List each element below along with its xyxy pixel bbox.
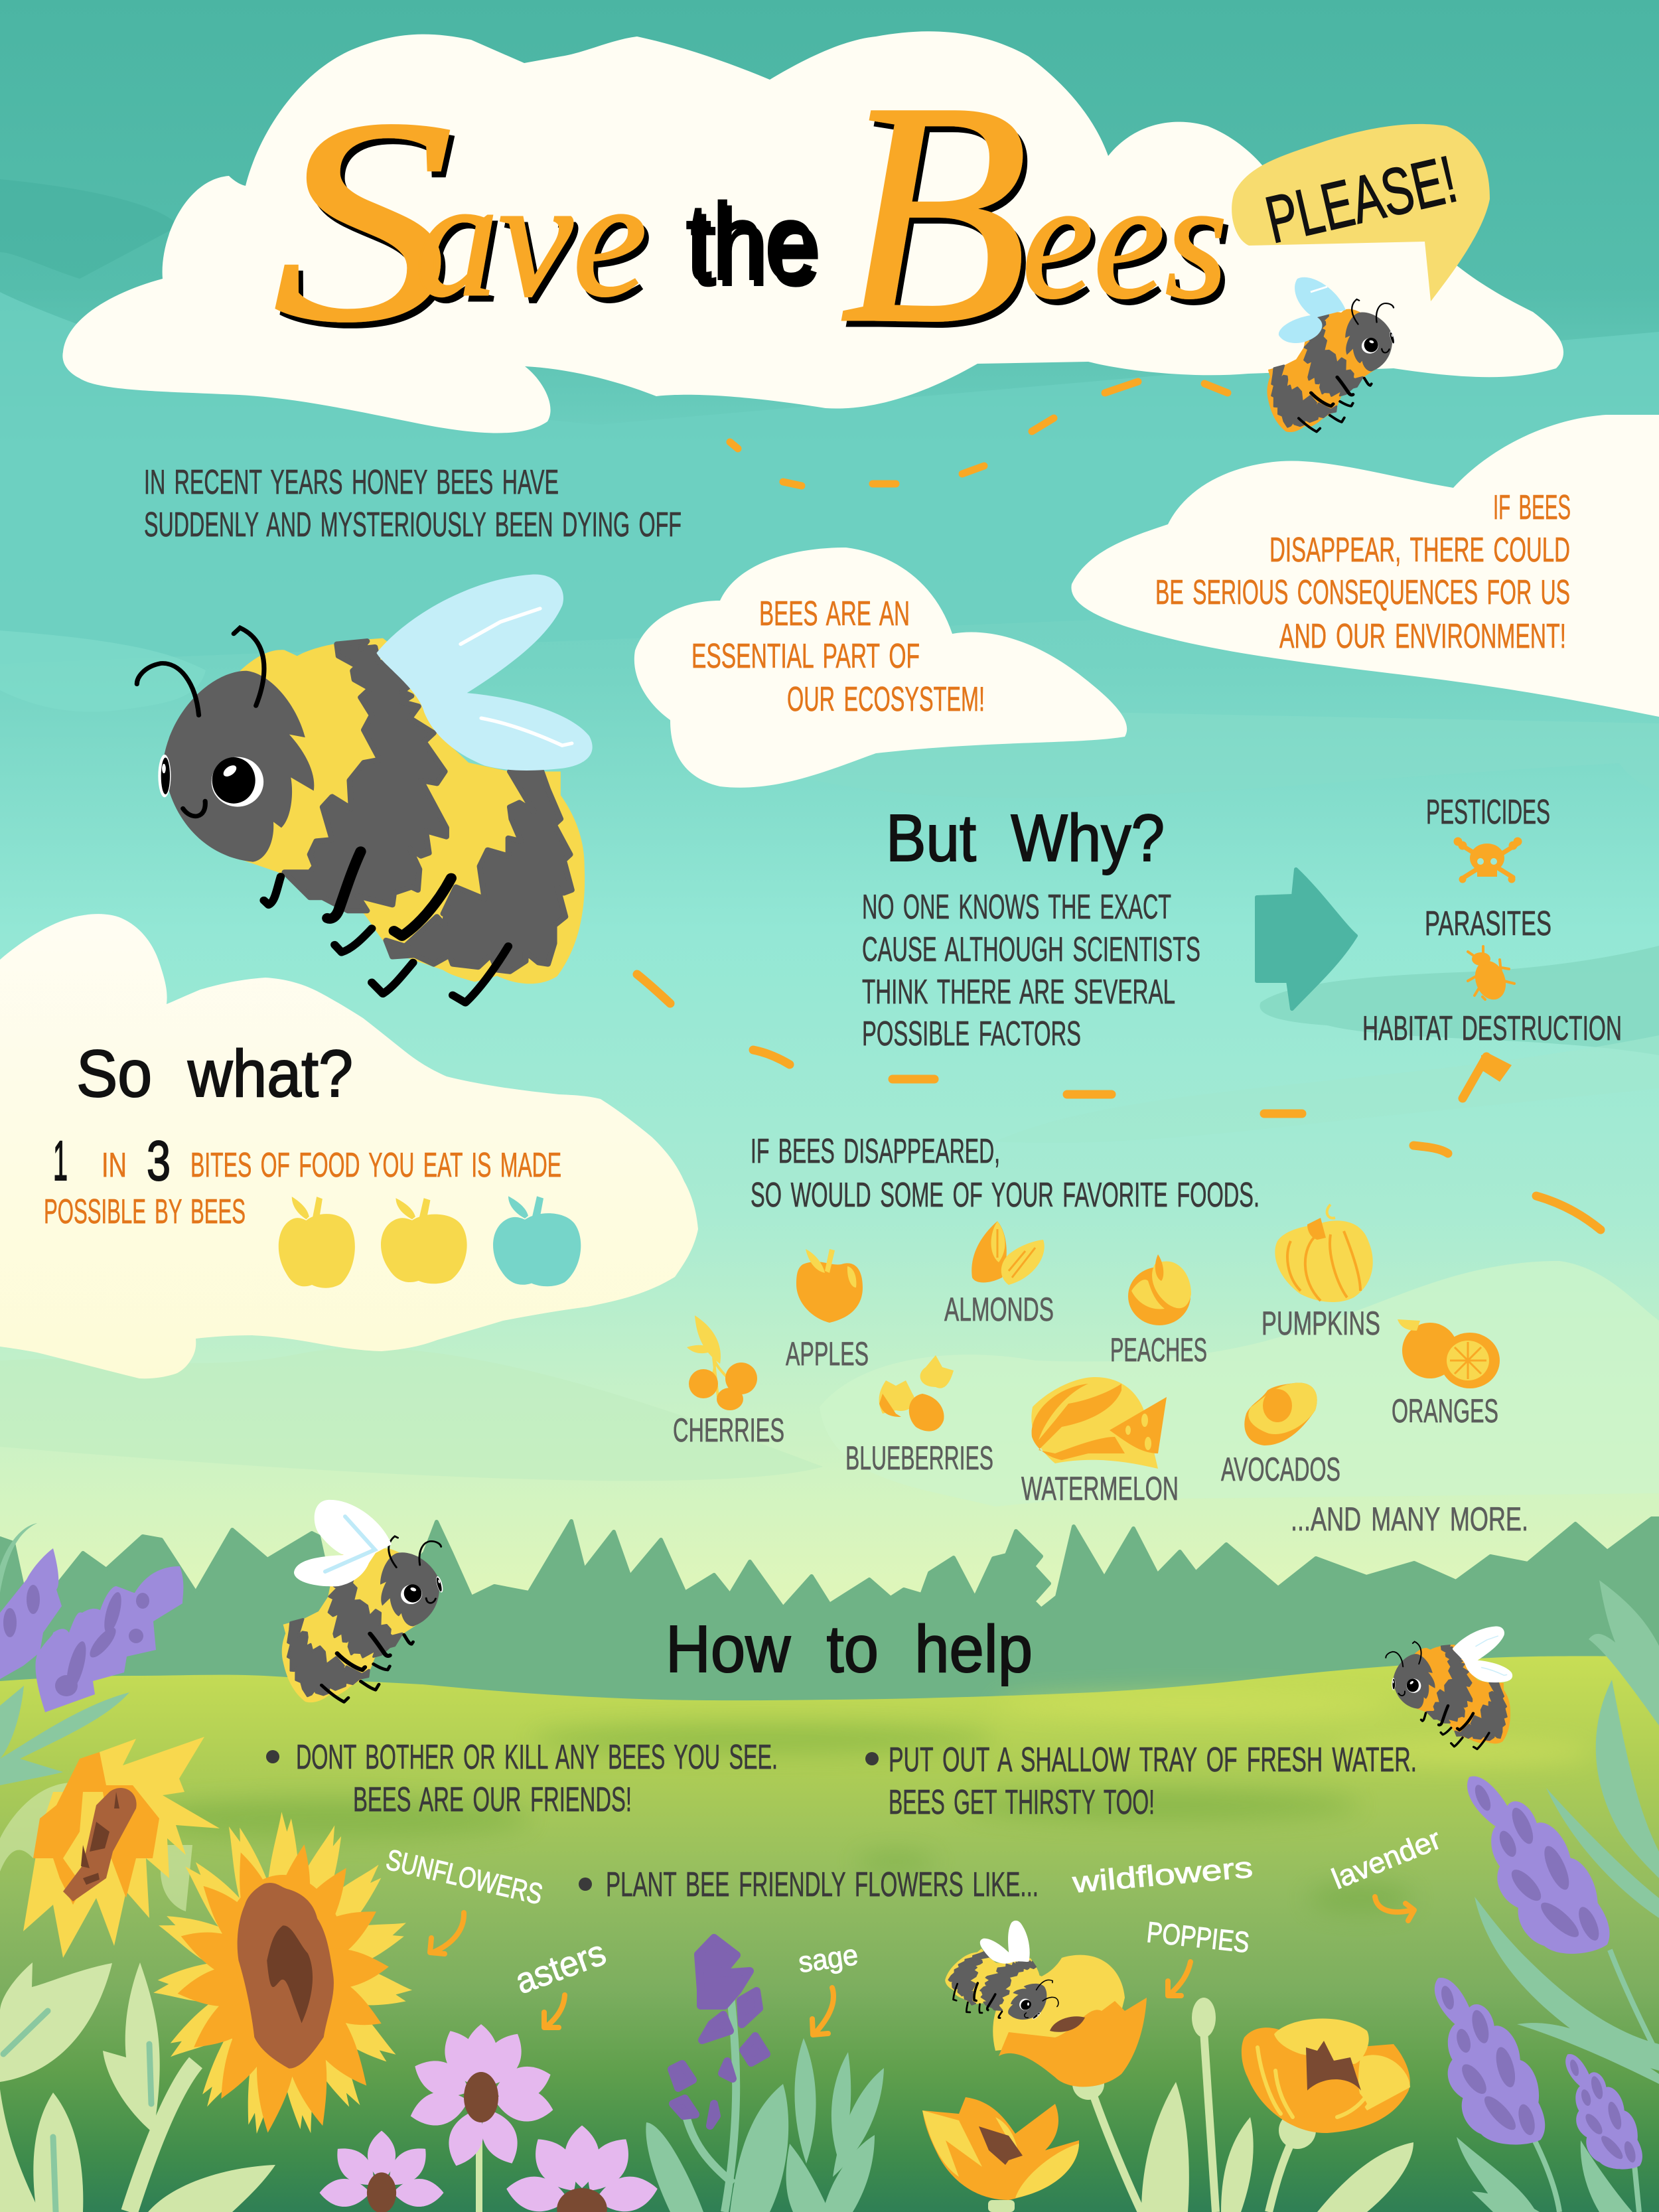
flower labels: lavender bbox=[1327, 1823, 1445, 1895]
icon: avocado bbox=[1244, 1382, 1317, 1445]
panel: foods bbox=[673, 1205, 1528, 1538]
panel: ecosystem cloud: ESSENTIAL PART OF bbox=[691, 637, 920, 676]
hills bbox=[0, 1518, 1659, 1726]
icon: peach bbox=[1128, 1254, 1191, 1325]
meadow paint streaks bbox=[133, 1692, 1593, 1913]
statistic text: POSSIBLE BY BEES bbox=[44, 1193, 246, 1231]
but why text: CAUSE ALTHOUGH SCIENTISTS bbox=[862, 930, 1200, 969]
icon: large bee bbox=[137, 574, 593, 1003]
tips: BEES ARE OUR FRIENDS! bbox=[353, 1781, 632, 1819]
icon: cherries bbox=[687, 1315, 757, 1410]
panel: consequences cloud bbox=[1071, 415, 1659, 717]
icon: skull and crossbones bbox=[1454, 838, 1522, 883]
foods intro text bbox=[751, 1132, 1260, 1215]
flight path top bbox=[730, 382, 1228, 486]
panel: foods: BLUEBERRIES bbox=[845, 1439, 993, 1477]
intro text bbox=[144, 463, 682, 544]
statistic text: IN bbox=[102, 1146, 127, 1185]
plant: sage and lavender bbox=[646, 1938, 884, 2212]
tips bbox=[266, 1738, 1417, 1904]
flower: side sunflower bbox=[23, 1737, 220, 1958]
title: ave bbox=[415, 145, 647, 332]
aster small bbox=[320, 2130, 443, 2212]
panel: foods: WATERMELON bbox=[1021, 1470, 1179, 1507]
title: the bbox=[685, 181, 817, 303]
panel: so what cloud bbox=[0, 914, 698, 1378]
flower labels: wildflowers bbox=[1070, 1851, 1254, 1899]
intro text: SUDDENLY AND MYSTERIOUSLY BEEN DYING OFF bbox=[144, 506, 682, 544]
flower labels bbox=[383, 1823, 1445, 2002]
aster main bbox=[406, 2024, 556, 2172]
icon: blueberries bbox=[879, 1355, 954, 1432]
panel: foods: ...AND MANY MORE. bbox=[1291, 1501, 1528, 1538]
factors list: PARASITES bbox=[1425, 905, 1551, 943]
flower labels: sage bbox=[796, 1939, 860, 1979]
statistic text bbox=[44, 1130, 561, 1231]
heading: so what: So what? bbox=[76, 1037, 353, 1111]
panel: foods: PUMPKINS bbox=[1262, 1305, 1380, 1342]
but why text: NO ONE KNOWS THE EXACT bbox=[862, 888, 1171, 926]
icon: orange bee near bubble bbox=[1249, 277, 1419, 442]
but why text bbox=[862, 888, 1200, 1053]
icon: bee on hills left bbox=[259, 1500, 473, 1714]
poppy right bbox=[1242, 2018, 1410, 2133]
statistic text: 3 bbox=[147, 1130, 171, 1192]
plants: left leaves bbox=[0, 1783, 275, 2212]
icon: bee on poppy bbox=[935, 1913, 1077, 2055]
panel: title cloud bbox=[62, 31, 1563, 433]
title: ees bbox=[1022, 147, 1228, 334]
flower: asters bbox=[320, 2024, 660, 2212]
but why text: THINK THERE ARE SEVERAL bbox=[862, 973, 1175, 1011]
flower: large sunflower bbox=[151, 1812, 413, 2138]
plants: right leaves bbox=[1457, 1580, 1659, 2212]
factors list bbox=[1362, 793, 1622, 1098]
flower labels: asters bbox=[510, 1933, 611, 2002]
arrow bbox=[1257, 869, 1356, 1009]
heading: but why: But Why? bbox=[886, 801, 1165, 875]
meadow bbox=[0, 1656, 1659, 2212]
panel: ecosystem cloud: BEES ARE AN bbox=[759, 595, 910, 633]
icon: axe bbox=[1463, 1054, 1512, 1098]
icon: watermelon bbox=[1031, 1377, 1167, 1469]
flower labels: POPPIES bbox=[1145, 1916, 1251, 1959]
statistic text: 1 bbox=[53, 1130, 68, 1192]
panel: foods: AVOCADOS bbox=[1221, 1451, 1340, 1488]
icon: three apples bbox=[279, 1196, 581, 1288]
flowers: poppies bbox=[922, 1955, 1413, 2212]
title: B bbox=[839, 36, 1029, 389]
panel: foods: CHERRIES bbox=[673, 1412, 784, 1449]
panel: foods: APPLES bbox=[786, 1335, 869, 1372]
foods intro text: SO WOULD SOME OF YOUR FAVORITE FOODS. bbox=[751, 1176, 1260, 1215]
tips: PLANT BEE FRIENDLY FLOWERS LIKE... bbox=[606, 1866, 1039, 1904]
panel: foods: ALMONDS bbox=[944, 1291, 1054, 1328]
speech bubble: please bbox=[1232, 124, 1490, 301]
icon: almonds bbox=[972, 1221, 1045, 1285]
poppy left bbox=[922, 2097, 1079, 2200]
statistic text: BITES OF FOOD YOU EAT IS MADE bbox=[190, 1146, 561, 1185]
heading: how to help: How to help bbox=[666, 1612, 1033, 1686]
icon: apple bbox=[796, 1249, 863, 1323]
title: S bbox=[272, 59, 455, 382]
but why text: POSSIBLE FACTORS bbox=[862, 1015, 1081, 1053]
flight path lower bbox=[637, 974, 1601, 1230]
icon: beetle bbox=[1468, 946, 1514, 1004]
panel: foods: PEACHES bbox=[1110, 1331, 1207, 1368]
panel: foods: ORANGES bbox=[1392, 1392, 1498, 1430]
icon: pumpkin bbox=[1275, 1205, 1373, 1302]
icon: bee right bbox=[1386, 1626, 1512, 1749]
tips: BEES GET THIRSTY TOO! bbox=[889, 1783, 1155, 1822]
panel: ecosystem cloud: OUR ECOSYSTEM! bbox=[787, 680, 985, 719]
tips: DONT BOTHER OR KILL ANY BEES YOU SEE. bbox=[296, 1738, 778, 1777]
poppy with bee bbox=[993, 1955, 1147, 2087]
factors list: PESTICIDES bbox=[1426, 793, 1550, 832]
panel: consequences cloud: IF BEES bbox=[1493, 488, 1571, 527]
sky paint washes bbox=[0, 179, 1659, 1507]
plants: right lavender bbox=[1422, 1748, 1648, 2180]
panel: ecosystem cloud bbox=[634, 548, 1127, 788]
foods intro text: IF BEES DISAPPEARED, bbox=[751, 1132, 1000, 1171]
flower labels: SUNFLOWERS bbox=[383, 1844, 545, 1911]
intro text: IN RECENT YEARS HONEY BEES HAVE bbox=[144, 463, 559, 502]
icon: oranges bbox=[1398, 1319, 1500, 1388]
plants: left lavender bbox=[0, 1523, 183, 1785]
small orange arrows bbox=[430, 1897, 1414, 2035]
speech bubble: please: PLEASE! bbox=[1259, 142, 1463, 258]
aster right bbox=[504, 2125, 660, 2212]
title bbox=[272, 36, 1228, 389]
